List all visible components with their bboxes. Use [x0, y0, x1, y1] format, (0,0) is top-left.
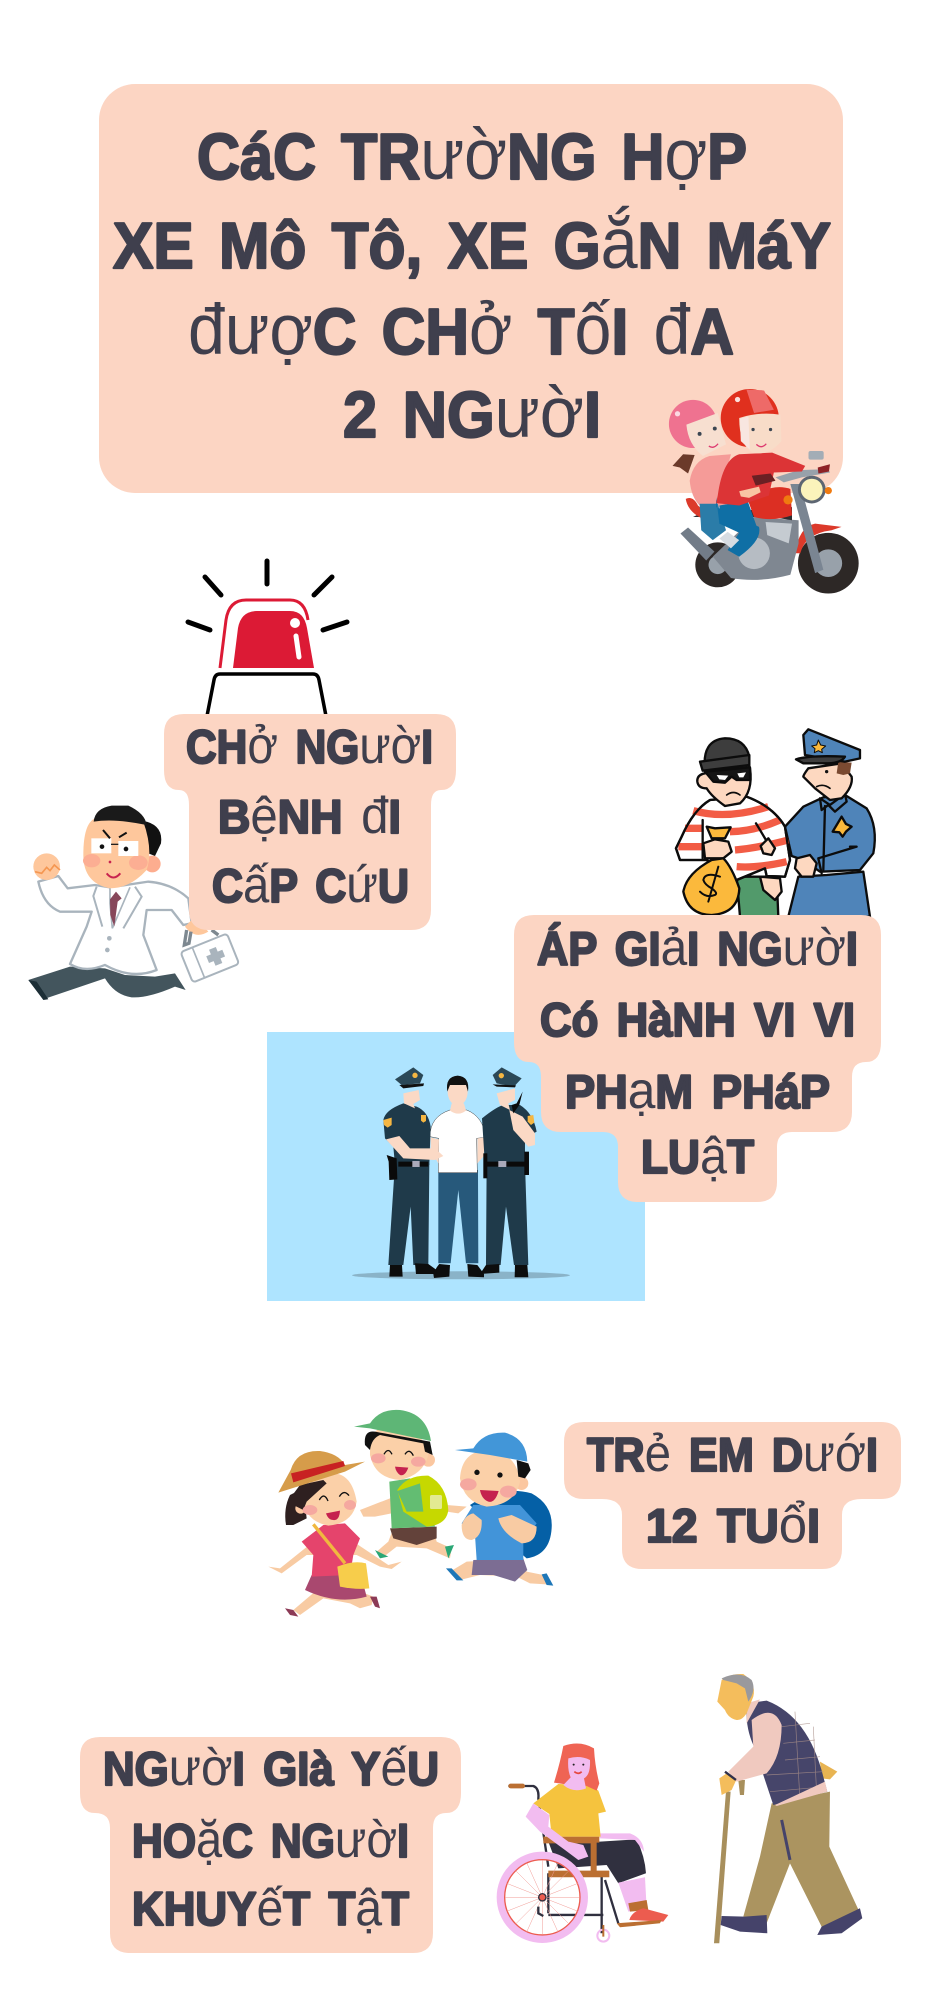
icon: couple riding a motorbike — [669, 389, 859, 594]
text: elderly label: NGườI GIà YếU — [103, 1738, 439, 1796]
heading: title text: CáC TRườNG HợP — [197, 115, 747, 195]
text: patient label: CấP CứU — [212, 855, 409, 913]
heading: title text: đượC CHở TốI đA — [188, 290, 734, 370]
icon: woman in a wheelchair — [501, 1743, 668, 1942]
panel: elderly or disabled people — [80, 1737, 461, 1953]
icon: three children walking — [268, 1410, 553, 1617]
text: children label: TRẻ EM DướI — [587, 1424, 878, 1482]
illustration: blue panel with two police officers and a man — [267, 1032, 645, 1301]
text: children label: 12 TUổI — [646, 1495, 820, 1553]
panel: title — [99, 84, 843, 493]
text: children label — [587, 1424, 878, 1553]
text: patient label: CHở NGườI — [186, 716, 433, 774]
text: elderly label — [103, 1738, 439, 1936]
heading: title text — [113, 115, 831, 453]
panel: escorting a law offender — [514, 915, 881, 1202]
text: elderly label: KHUYếT TậT — [132, 1878, 409, 1936]
panel: children under 12 — [564, 1422, 901, 1569]
text: offender label — [537, 918, 858, 1184]
heading: title text: XE Mô Tô, XE GắN MáY — [113, 204, 831, 284]
text: offender label: LUậT — [641, 1126, 754, 1184]
panel: carrying a patient to emergency — [164, 714, 456, 930]
icon: siren light — [188, 561, 347, 716]
text: elderly label: HOặC NGườI — [132, 1810, 409, 1868]
icon: thief and policeman — [676, 729, 875, 917]
text: offender label: ÁP GIảI NGườI — [537, 918, 858, 976]
text: offender label: Có HàNH VI VI — [540, 993, 855, 1046]
text: offender label: PHạM PHáP — [565, 1061, 830, 1119]
text: patient label — [186, 716, 433, 913]
text: patient label: BệNH đI — [218, 786, 401, 844]
heading: title text: 2 NGườI — [343, 373, 601, 453]
icon: elderly man with a cane — [714, 1674, 862, 1943]
icon: running doctor — [28, 806, 239, 1000]
